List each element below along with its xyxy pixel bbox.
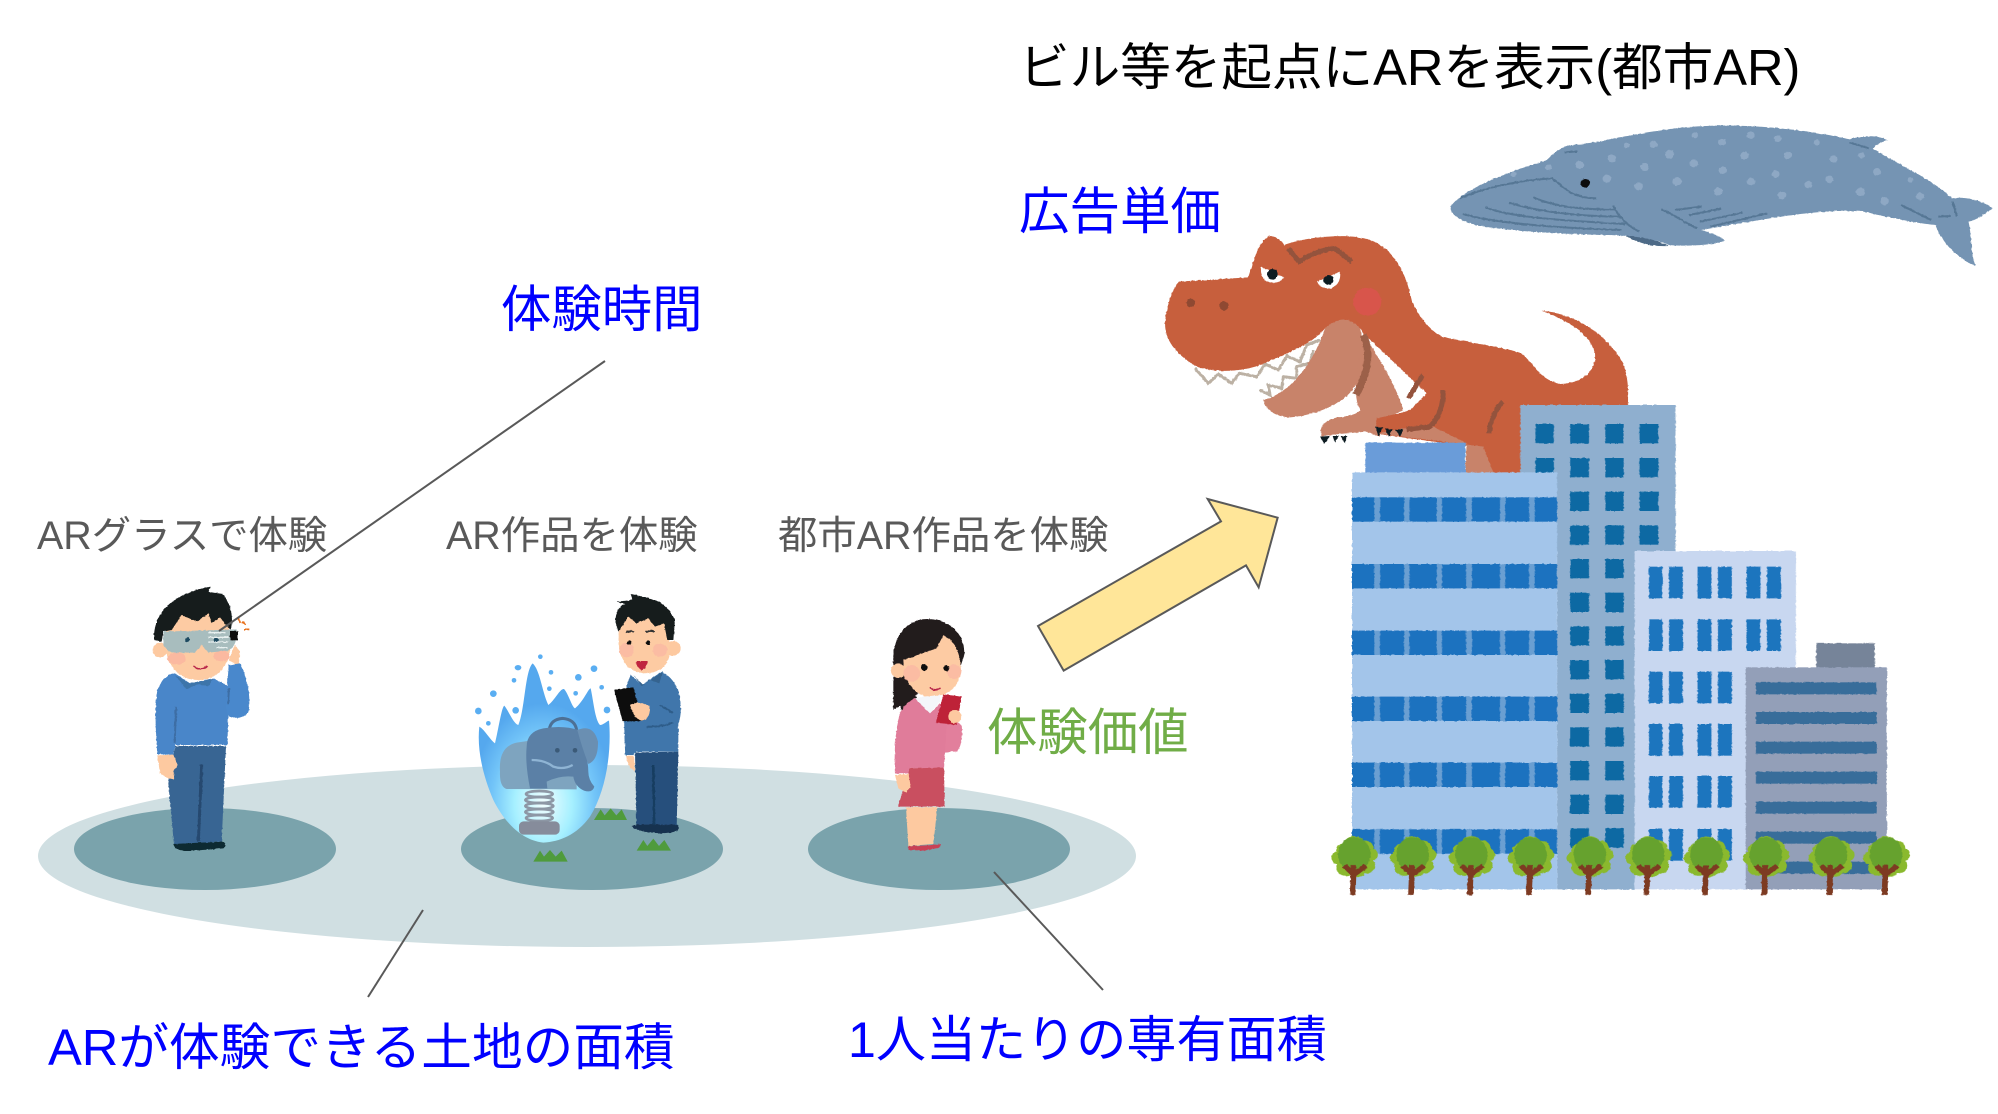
grass tufts [533,808,671,862]
dinosaur [1165,236,1628,477]
person with AR glasses [153,587,249,851]
eyes [1261,267,1284,283]
pale building [1635,551,1796,889]
person looking at phone [614,594,681,833]
light blue building [1352,443,1557,889]
label: AR glasses experience: ARグラスで体験 [37,514,327,558]
label: experience value: 体験価値 [987,704,1189,761]
person with red phone [891,619,964,851]
personal area ellipse 3 [808,808,1070,890]
illustration: AR elephant spring ride in blue flame [475,654,610,843]
label: land area for AR: ARが体験できる土地の面積 [48,1019,675,1076]
label: city AR work experience: 都市AR作品を体験 [778,514,1108,558]
whale [1451,125,1992,266]
label: AR work experience: AR作品を体験 [446,514,698,558]
lower jaw [1263,319,1363,417]
blue flame [479,663,610,843]
buildings [1331,405,1910,895]
spring and base [525,791,553,821]
leader line: personal area [994,872,1103,990]
grey building [1746,643,1887,889]
teeth [1195,327,1323,400]
arrow [1038,499,1278,671]
label: exclusive area per person: 1人当たりの専有面積 [848,1012,1327,1068]
body [1165,236,1628,477]
label: experience time: 体験時間 [501,281,703,338]
flame droplets [475,654,610,726]
title: ビル等を起点にARを表示(都市AR) [1019,39,1800,96]
personal area ellipse 2 [461,808,723,890]
row of trees [1331,836,1910,895]
label: ad unit price: 広告単価 [1019,183,1221,240]
leader line: land area [368,910,423,997]
belly and arm [1321,333,1403,437]
leader line: experience time [219,361,605,631]
personal area ellipse 1 [74,808,336,890]
steel blue tower [1520,405,1676,889]
land area ellipse [38,765,1136,947]
elephant seat [549,718,577,730]
claws [1320,427,1403,444]
